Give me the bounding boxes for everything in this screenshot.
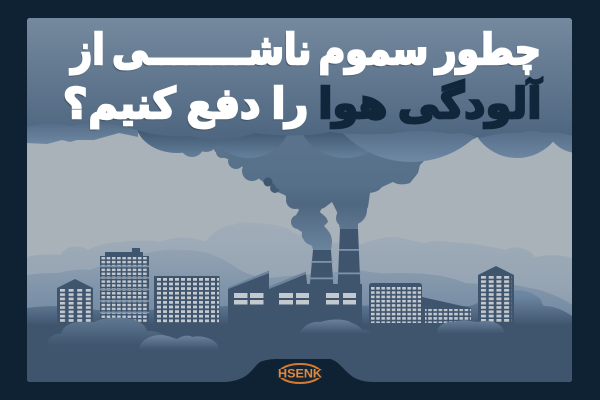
- chimney: right: [337, 229, 361, 284]
- logo: HSENK: [278, 368, 323, 380]
- factory: [228, 270, 362, 322]
- factory windows: [234, 293, 356, 304]
- foreground cloud: right 1: [301, 320, 368, 332]
- front hills: [27, 290, 572, 324]
- title line 2: white part: را دفع کنیم: [88, 79, 308, 128]
- logo notch: [226, 359, 373, 384]
- smoke plume: [214, 125, 425, 250]
- building: left tall tower: [100, 248, 149, 324]
- back hills: [27, 222, 572, 305]
- foreground cloud: left large: [49, 318, 164, 340]
- title line 1: چطور سموم ناشــــــــی از: [71, 25, 541, 74]
- cloud band: dark lobes: [138, 130, 477, 158]
- building: right tower: [478, 266, 514, 324]
- factory base: [307, 284, 362, 320]
- building: wide block: [154, 276, 220, 324]
- cloud band: light strip and lobes: [27, 123, 572, 162]
- logo: [277, 364, 323, 383]
- mid hills: [27, 250, 572, 316]
- building: small left house: [57, 279, 93, 324]
- top cloud band: [27, 18, 572, 139]
- title line 2: dark part: آلودگی هوا: [318, 79, 541, 128]
- building: right low block: [369, 283, 471, 324]
- ground: [27, 335, 572, 382]
- title question mark: ؟: [63, 79, 87, 128]
- foreground cloud: left small: [140, 335, 218, 348]
- foreground cloud: right 2: [438, 320, 504, 332]
- chimney: left: [309, 250, 334, 284]
